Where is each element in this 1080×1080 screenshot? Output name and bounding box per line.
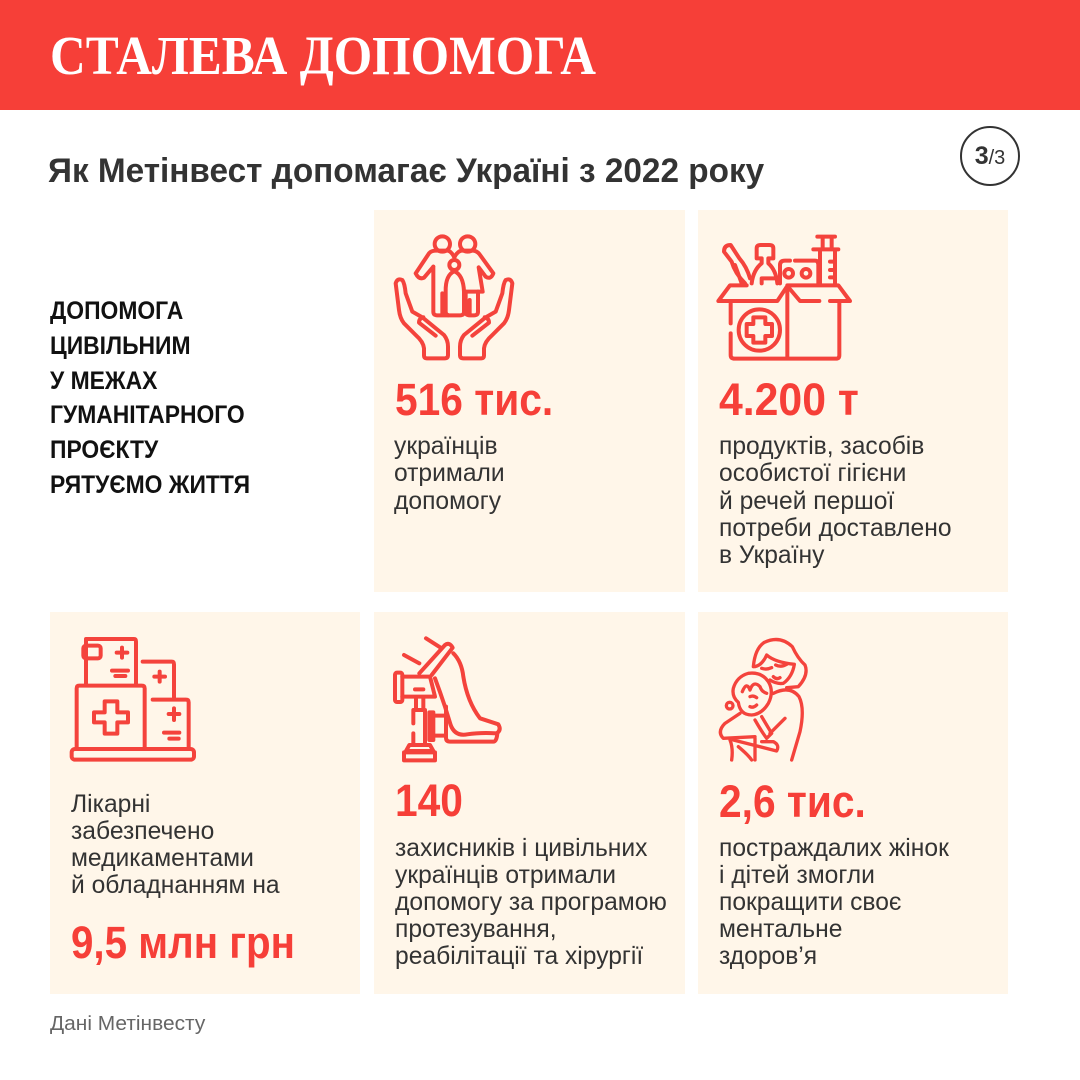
title: СТАЛЕВА ДОПОМОГА [50,25,596,86]
text: description: і дітей змогли [719,861,875,889]
icon: family in hands [394,234,514,360]
panel: 2.6 thousand women and children [698,612,1008,994]
text block: section heading: РЯТУЄМО ЖИТТЯ [50,471,250,499]
text: description: покращити своє [719,888,901,916]
text block: section heading: ДОПОМОГА [50,297,183,325]
icon: medicine boxes [70,637,196,762]
text: description [395,834,667,970]
panel: 516 thousand Ukrainians [374,210,685,592]
icon: prosthetic leg [393,636,502,762]
panel: hospitals supplied [50,612,360,994]
source note: Дані Метінвесту [50,1013,205,1035]
text: description: постраждалих жінок [719,834,949,862]
text: description: й обладнанням на [71,871,280,899]
page badge 3/3 [960,126,1020,186]
text block: section heading: У МЕЖАХ [50,367,157,395]
text: description: ментальне [719,915,842,943]
stat: 4200 tons: 4.200 т [719,374,859,425]
text: description [719,834,949,970]
text: description: Лікарні [71,790,150,818]
panel: 4200 tons of goods [698,210,1008,592]
panel: 140 prosthetics [374,612,685,994]
text: description [719,432,952,569]
text: description: й речей першої [719,487,894,515]
text block: section heading: ПРОЄКТУ [50,436,158,464]
text: description: українців [394,432,498,460]
stat: 140: 140 [395,775,463,826]
stat: 516 thousand: 516 тис. [395,374,553,425]
page badge 3/3: 3/3 [975,142,1005,170]
text: description: потреби доставлено [719,514,952,542]
text: description: в Україну [719,541,824,569]
text: description: допомогу [394,487,501,515]
header banner [0,0,1080,110]
icon: box of supplies [716,234,852,361]
text: description: протезування, [395,915,557,943]
text: description [394,432,505,515]
text block: section heading [50,297,250,499]
icon: mother hugging child [718,638,808,762]
text block: section heading: ГУМАНІТАРНОГО [50,401,245,429]
stat: 9.5 million UAH: 9,5 млн грн [71,917,295,968]
text: description: реабілітації та хірургії [395,942,643,970]
text: description: медикаментами [71,844,254,872]
text: description [71,790,280,899]
text: description: допомогу за програмою [395,888,667,916]
subtitle: Як Метінвест допомагає Україні з 2022 року [48,152,764,190]
text: description: продуктів, засобів [719,432,924,460]
text: description: отримали [394,459,505,487]
text: description: особистої гігієни [719,459,906,487]
text: description: українців отримали [395,861,616,889]
text: description: забезпечено [71,817,214,845]
text: description: здоров’я [719,942,817,970]
text block: section heading: ЦИВІЛЬНИМ [50,332,191,360]
stat: 2.6 thousand: 2,6 тис. [719,776,866,827]
text: description: захисників і цивільних [395,834,647,862]
